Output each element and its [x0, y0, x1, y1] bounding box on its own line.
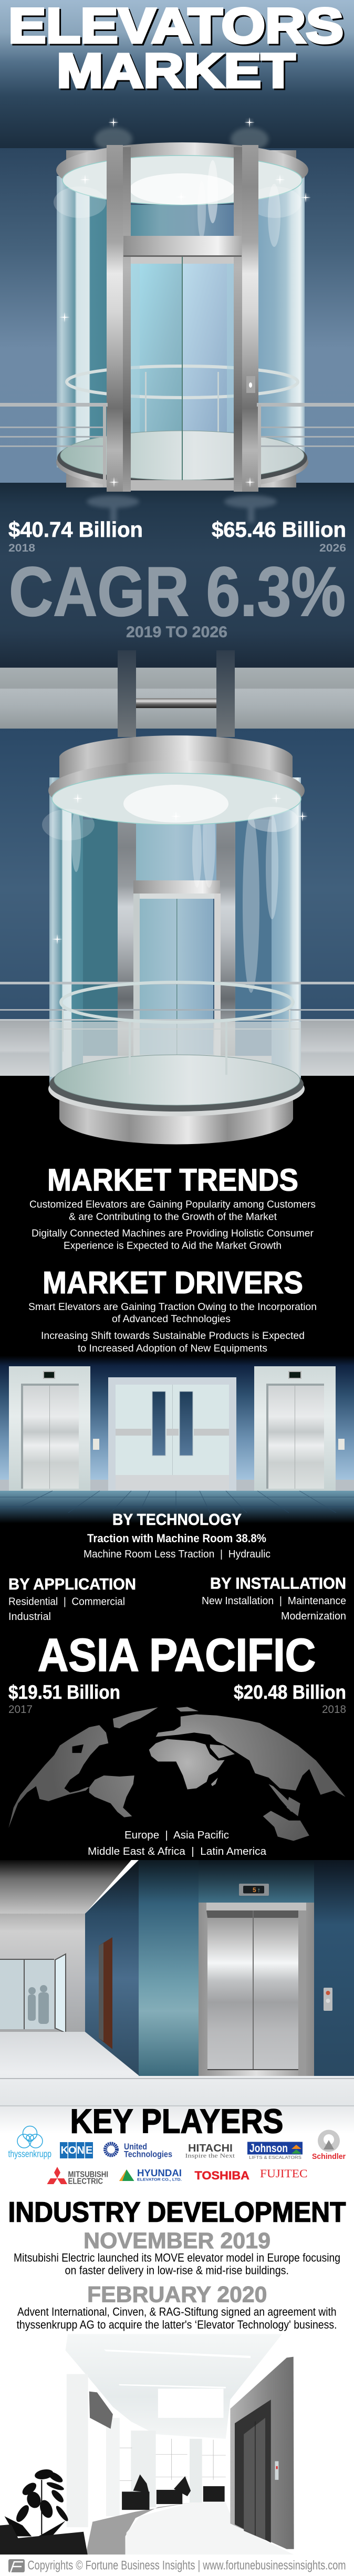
- segment: by installation: BY INSTALLATION: [210, 1574, 346, 1593]
- segment: by installation: New Installation | Maintenance: [202, 1595, 346, 1607]
- glass floor: [48, 1062, 305, 1116]
- illustration: round glass elevator: [0, 142, 354, 523]
- logo: KONE: N: [77, 2145, 85, 2156]
- illustration panel: second glass elevator on hoist posts: [0, 650, 354, 1860]
- logo: KONE: O: [68, 2145, 77, 2156]
- development: November 2019: NOVEMBER 2019: [84, 2228, 270, 2253]
- photo: monochrome elevator lobby: [0, 2334, 294, 2554]
- elevator wall: [230, 2357, 294, 2549]
- call button: [246, 376, 255, 393]
- illustration panel: corridor with elevator doors: [0, 1356, 354, 1523]
- window with silhouettes: [0, 1954, 66, 2033]
- stat: Asia Pacific 2017: [8, 1681, 120, 1716]
- stat: Asia Pacific 2017: $19.51 Billion: [8, 1681, 120, 1703]
- logo: Mitsubishi Electric: ELECTRIC: [68, 2177, 103, 2186]
- ceiling light strips: [104, 2350, 251, 2418]
- side railings: [0, 982, 354, 984]
- region list: [88, 1830, 267, 1857]
- development: November 2019: on faster delivery in low-rise & mid-rise buildings.: [65, 2264, 289, 2277]
- logo: Schindler: Schindler: [312, 2152, 346, 2161]
- segment: by application: Industrial: [8, 1611, 51, 1623]
- segment: by installation: Modernization: [281, 1611, 346, 1622]
- sparkles: [52, 793, 308, 944]
- section: market trends: Experience is Expected to Aid the Market Growth: [64, 1240, 282, 1251]
- logo: thyssenkrupp: [8, 2126, 51, 2159]
- segment: by application: Residential | Commercial: [8, 1596, 125, 1607]
- canopy drum and ring: [59, 735, 293, 783]
- logo: KONE: E: [86, 2145, 92, 2156]
- title: Elevators Market: ELEVATORS: [10, 0, 345, 55]
- section: market trends: Customized Elevators are Gaining Popularity among Customers: [29, 1199, 316, 1210]
- stat: Asia Pacific 2018: 2018: [322, 1704, 346, 1716]
- logo: Schindler: [312, 2130, 346, 2161]
- elevator doors: [235, 2400, 271, 2543]
- icon: ceiling spotlights: [95, 117, 268, 151]
- ceiling: [0, 1860, 131, 1914]
- call panel: [275, 2461, 278, 2480]
- lounge chairs and distant plants: [122, 2474, 225, 2510]
- region list: Europe | Asia Pacific: [124, 1830, 229, 1841]
- section: market trends: Digitally Connected Machines are Providing Holistic Consumer: [32, 1228, 314, 1239]
- section: market drivers: Smart Elevators are Gaining Traction Owing to the Incorporation: [28, 1301, 317, 1313]
- stat: market size 2026: [212, 517, 346, 554]
- heading: Asia Pacific: ASIA PACIFIC: [38, 1629, 316, 1681]
- glass cylinder: [49, 777, 83, 1087]
- floor indicator: 5: [253, 1886, 256, 1894]
- segment: by technology: BY TECHNOLOGY: [112, 1510, 242, 1529]
- section: market drivers: of Advanced Technologies: [112, 1313, 231, 1325]
- logo: Hyundai Elevator: ELEVATOR CO., LTD.: [137, 2178, 182, 2182]
- floor: [0, 2032, 354, 2106]
- logo: United Technologies: [105, 2142, 172, 2159]
- section: key players heading: KEY PLAYERS: [70, 2102, 284, 2140]
- logo: Johnson Lifts: [247, 2142, 303, 2160]
- title: Elevators Market: MARKET: [57, 44, 295, 98]
- logo: Mitsubishi Electric: [47, 2167, 108, 2186]
- side railings: [0, 403, 354, 487]
- wall-mounted unit: [89, 2392, 113, 2429]
- logo: United Technologies: Technologies: [124, 2149, 172, 2159]
- segment: by technology: Machine Room Less Traction | Hydraulic: [84, 1549, 270, 1560]
- floor tile lines: [0, 1491, 354, 1513]
- elevator door: [199, 1903, 314, 2076]
- light streaks in glass: [71, 793, 278, 993]
- section: market trends: & are Contributing to the Growth of the Market: [69, 1211, 277, 1223]
- development: February 2020: [17, 2282, 337, 2331]
- lower glass haze: [49, 1022, 301, 1077]
- section: market trends: MARKET TRENDS: [47, 1163, 298, 1198]
- back wall: [0, 1914, 85, 2032]
- wall above elevator: [199, 1860, 314, 1903]
- teal wall: [139, 1860, 199, 2076]
- segment: by technology: Traction with Machine Room 38.8%: [87, 1532, 266, 1545]
- section: market drivers: to Increased Adoption of New Equipments: [78, 1343, 267, 1354]
- segment: by application: BY APPLICATION: [8, 1575, 136, 1593]
- logo: Toshiba: TOSHIBA: [194, 2169, 249, 2182]
- section: market drivers: MARKET DRIVERS: [43, 1265, 303, 1300]
- section: market drivers: Increasing Shift towards Sustainable Products is Expected: [41, 1330, 305, 1342]
- logo: Hitachi: HITACHI: [188, 2143, 233, 2154]
- base drum: [59, 1089, 293, 1145]
- title: Elevators Market: MARKET: [58, 46, 297, 99]
- stat: market size 2018: [8, 517, 143, 554]
- ceiling: [66, 2334, 282, 2439]
- logo: KONE: [60, 2142, 93, 2158]
- side wall with door: [85, 1860, 139, 2075]
- section: market trends: [29, 1163, 316, 1251]
- floor indicator: ↑: [257, 1886, 261, 1894]
- logo: thyssenkrupp: thyssenkrupp: [8, 2148, 51, 2159]
- illustration panel: lobby with elevator: [0, 1860, 354, 2138]
- floor indicator: [239, 1884, 269, 1896]
- cabin base plate: [131, 480, 234, 491]
- segment: by technology: [84, 1510, 270, 1560]
- elevator pillars: [107, 145, 123, 492]
- foreground sofa: [0, 2525, 88, 2554]
- development: November 2019: [14, 2228, 340, 2277]
- right dark wall: [314, 1860, 354, 2076]
- logo: Mitsubishi Electric: MITSUBISHI: [68, 2170, 108, 2179]
- stat: CAGR: 2019 TO 2026: [126, 624, 227, 641]
- segment: by application: [8, 1575, 136, 1623]
- left elevator: [9, 1366, 99, 1491]
- logo: Hitachi: Inspire the Next: [185, 2152, 235, 2159]
- sparkles: [59, 174, 311, 487]
- logo: Hyundai Elevator: HYUNDAI: [137, 2168, 182, 2178]
- logo: United Technologies: United: [124, 2142, 147, 2152]
- hero panel: glass elevator with title: [0, 0, 354, 668]
- region list: Middle East & Africa | Latin America: [88, 1846, 267, 1857]
- title: Elevators Market: [8, 0, 345, 99]
- door header band: [123, 236, 242, 255]
- floor reflections: [87, 495, 277, 523]
- columns and windows: [67, 2374, 226, 2527]
- stat: market size 2018: 2018: [8, 542, 35, 554]
- logo: KONE: K: [61, 2145, 68, 2156]
- carpet and floor: [86, 2502, 192, 2554]
- logo: Hitachi: [185, 2143, 235, 2159]
- stat: Asia Pacific 2018: [234, 1681, 346, 1716]
- call panel: [324, 1988, 332, 2011]
- stat: market size 2026: $65.46 Billion: [212, 517, 346, 542]
- stat: market size 2026: 2026: [319, 542, 346, 554]
- section: market drivers: [28, 1265, 317, 1354]
- logo: Hyundai Elevator: [119, 2168, 182, 2182]
- right elevator: [254, 1366, 345, 1491]
- logo: Fujitec: FUJITEC: [260, 2167, 308, 2180]
- top ring and lit ceiling glass: [56, 142, 308, 198]
- world map dome: [8, 1707, 346, 1841]
- segment: by installation: [202, 1574, 346, 1622]
- stat: Asia Pacific 2017: 2017: [8, 1704, 33, 1716]
- cabin handrail ring: [67, 366, 298, 398]
- bottom ring and glass floor: [56, 434, 308, 491]
- cabin handrail ring: [61, 982, 293, 1022]
- logo: Johnson Lifts: LIFTS & ESCALATORS: [249, 2155, 301, 2160]
- development: February 2020: FEBRUARY 2020: [87, 2282, 267, 2307]
- centre double door: [108, 1377, 236, 1491]
- foreground plant: [5, 2468, 70, 2536]
- logo: Johnson Lifts: Johnson: [249, 2142, 288, 2155]
- stat: market size 2018: $40.74 Billion: [8, 517, 143, 542]
